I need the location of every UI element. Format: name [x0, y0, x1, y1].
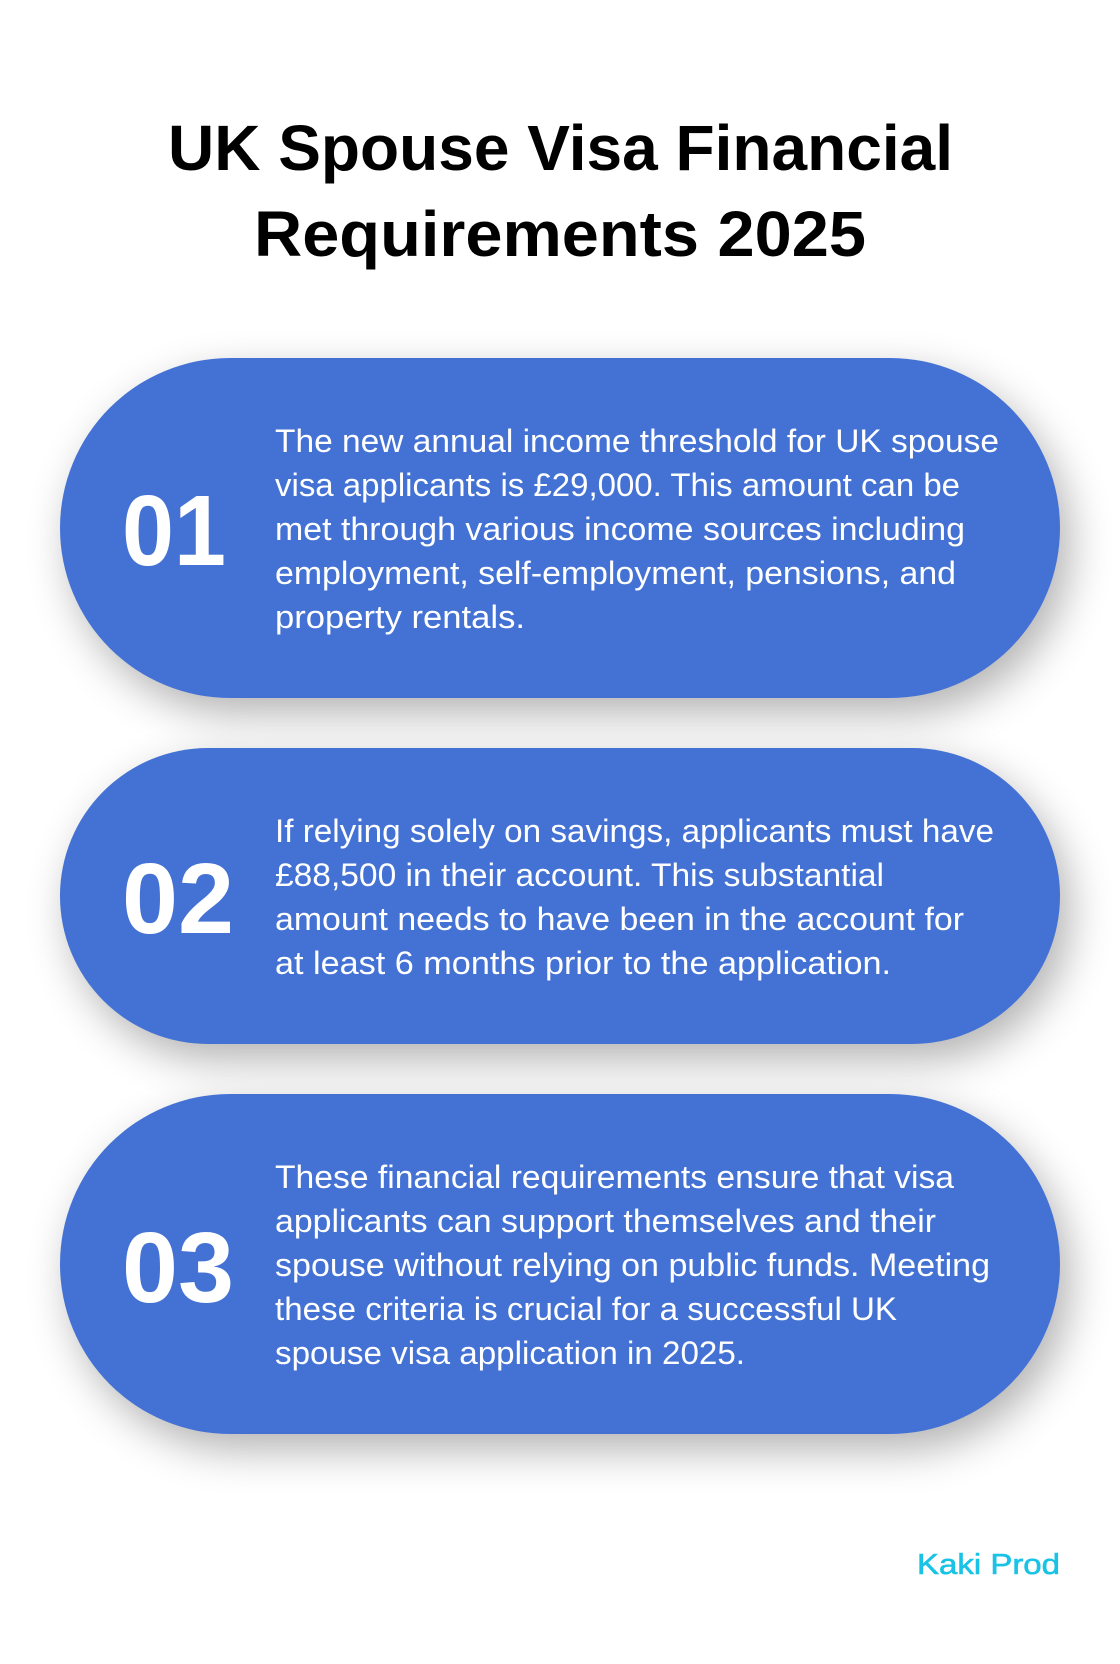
text block: income threshold: The new annual income threshold for UK spouse — [275, 423, 999, 459]
panel: income threshold — [60, 358, 1060, 698]
panel: purpose of requirements — [60, 1094, 1060, 1434]
text block: purpose of requirements — [275, 1159, 990, 1371]
text block: purpose of requirements: spouse without relying on public funds. Meeting — [275, 1247, 990, 1283]
step number 02: 02 — [122, 843, 234, 955]
text block: savings requirement — [275, 813, 994, 981]
title: Requirements 2025 — [254, 198, 866, 270]
title: UK Spouse Visa Financial — [168, 112, 953, 184]
brand logo: Kaki Prod — [917, 1549, 1060, 1581]
panel: savings requirement — [60, 748, 1060, 1044]
text block: purpose of requirements: These financial requirements ensure that visa — [275, 1159, 954, 1195]
text block: purpose of requirements: these criteria is crucial for a successful UK — [275, 1291, 897, 1327]
text block: purpose of requirements: applicants can support themselves and their — [275, 1203, 936, 1239]
text block: savings requirement: amount needs to have been in the account for — [275, 901, 964, 937]
title — [168, 112, 953, 270]
text block: income threshold: property rentals. — [275, 599, 525, 635]
text block: savings requirement: at least 6 months prior to the application. — [275, 945, 891, 981]
text block: savings requirement: If relying solely on savings, applicants must have — [275, 813, 994, 849]
text block: income threshold: employment, self-employment, pensions, and — [275, 555, 956, 591]
text block: savings requirement: £88,500 in their account. This substantial — [275, 857, 884, 893]
text block: income threshold: met through various income sources including — [275, 511, 965, 547]
text block: income threshold: visa applicants is £29,000. This amount can be — [275, 467, 960, 503]
step number 01: 01 — [122, 475, 226, 587]
text block: income threshold — [275, 423, 999, 635]
step number 03: 03 — [122, 1212, 234, 1324]
text block: purpose of requirements: spouse visa application in 2025. — [275, 1335, 745, 1371]
